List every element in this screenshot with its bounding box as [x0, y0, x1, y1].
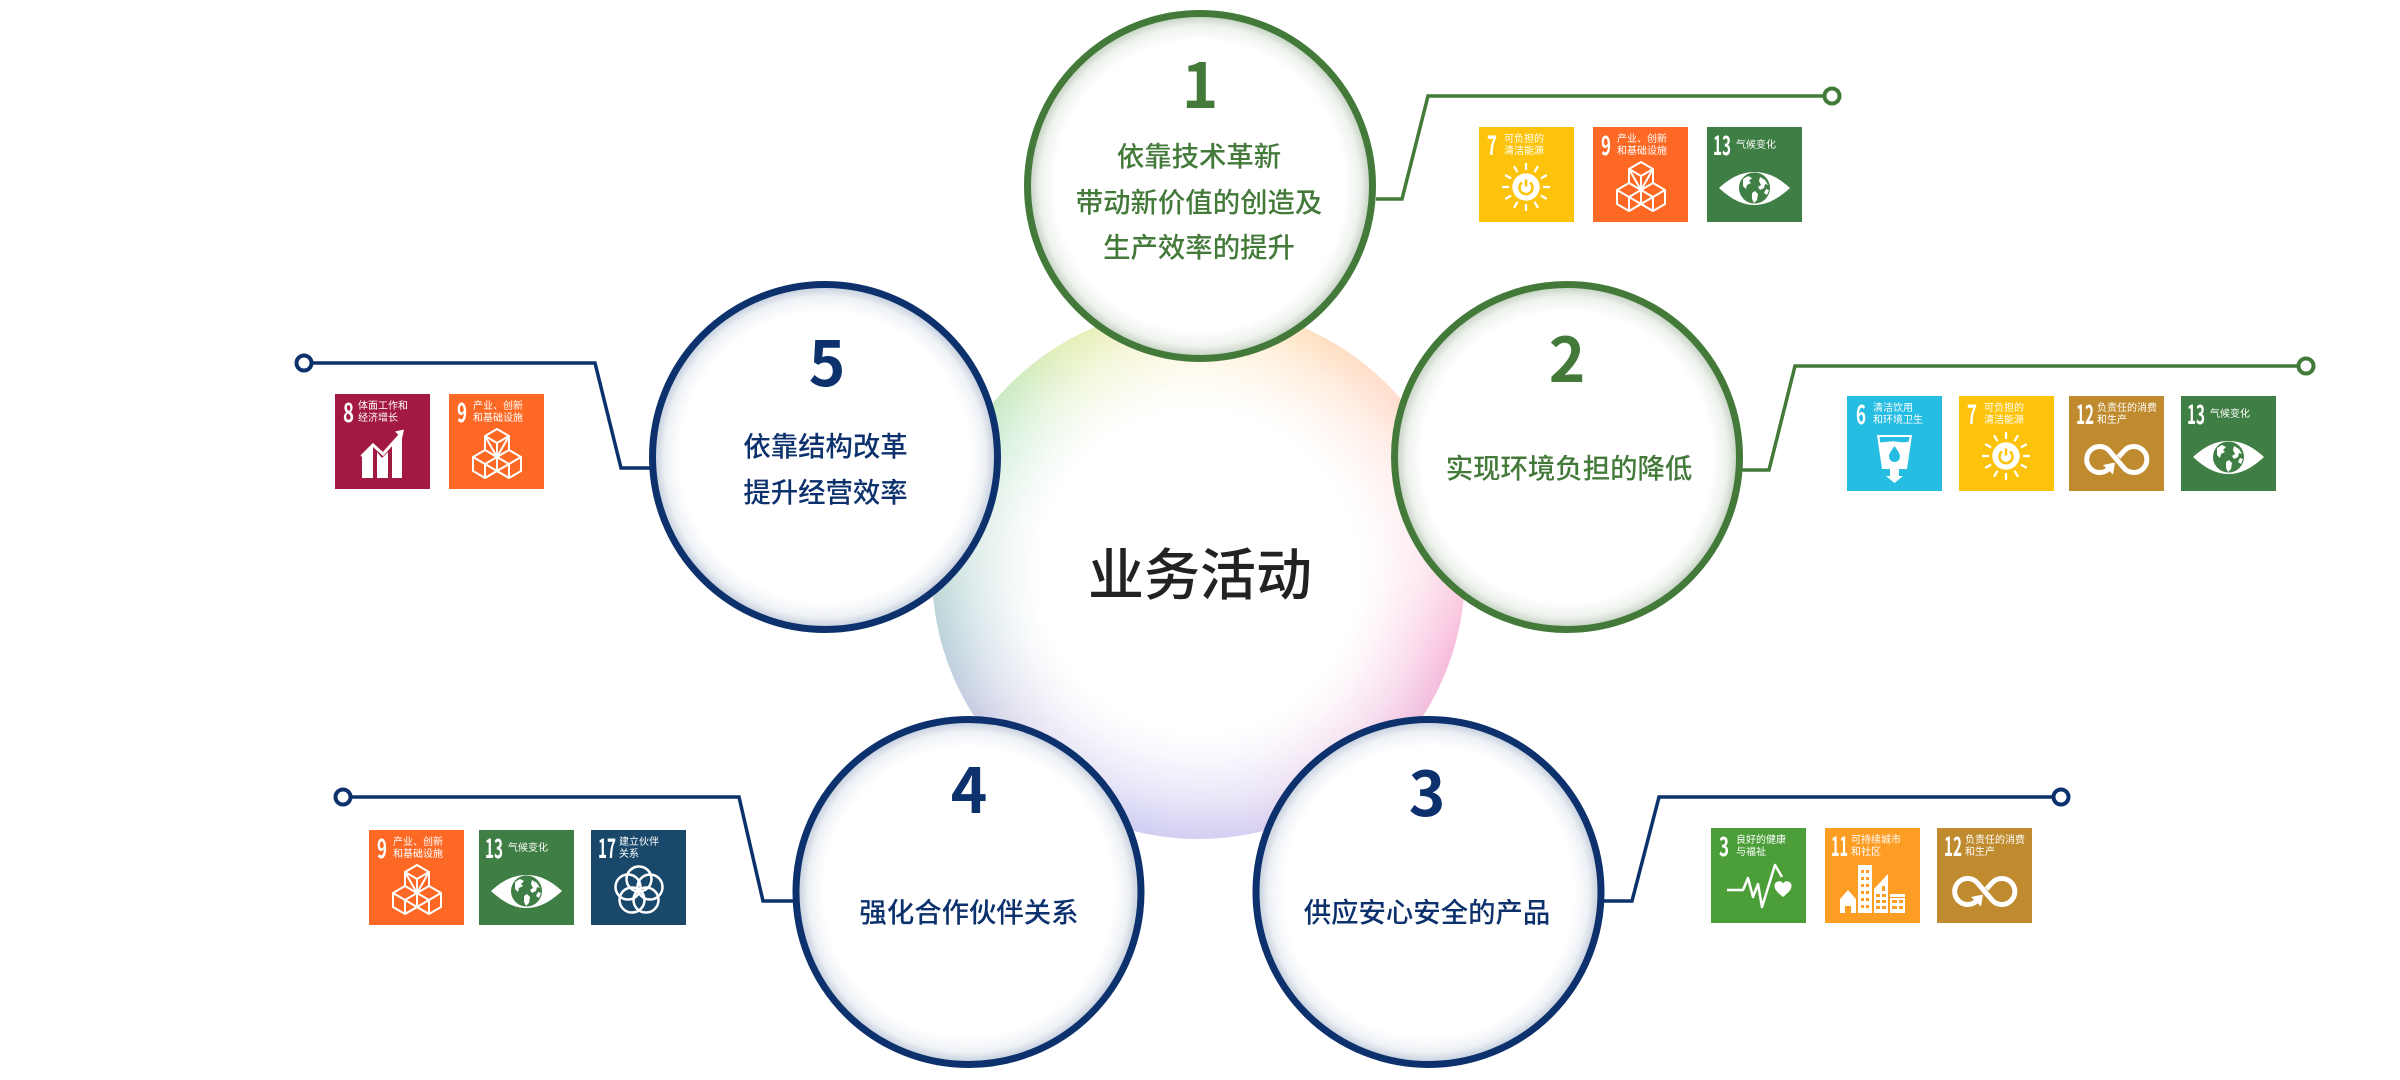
number 5: 5	[809, 314, 845, 404]
panel: circle 3	[1256, 720, 1601, 1064]
number 2: 2	[1549, 310, 1585, 400]
goal badge 13, circle 1: 13	[1713, 126, 1731, 163]
goal badge 8, circle 5: 体面工作和	[358, 400, 408, 412]
goal badge 9, circle 5: 和基础设施	[473, 411, 523, 424]
goal badge 13, circle 1: 气候变化	[1736, 138, 1776, 151]
text: circle 5: 依靠结构改革	[743, 431, 908, 462]
goal badge 17, circle 4: 关系	[619, 847, 639, 860]
goal badge 9, circle 1	[1593, 126, 1688, 222]
goal badge 9, circle 1: 9	[1601, 126, 1611, 163]
goal badge 9, circle 4: 产业、创新	[393, 835, 443, 848]
goal badge 12, circle 3	[1937, 827, 2032, 923]
text: circle 5: 提升经营效率	[743, 477, 908, 508]
goal badge 6, circle 2: 6	[1856, 395, 1866, 432]
goal badge 8, circle 5: 8	[343, 393, 354, 430]
goal badge 12, circle 2: 12	[2076, 395, 2094, 432]
goal badge 12, circle 3: 12	[1944, 827, 1962, 864]
text: circle 3: 供应安心安全的产品	[1304, 897, 1550, 928]
goal badge 7, circle 2: 可负担的	[1984, 401, 2024, 414]
central circle background	[932, 306, 1465, 839]
goal badge 7, circle 2	[1959, 395, 2054, 491]
goal badge 17, circle 4	[591, 829, 686, 925]
text: circle 2: 实现环境负担的降低	[1446, 453, 1692, 484]
goal badge 6, circle 2: 清洁饮用	[1873, 401, 1913, 414]
goal badge 11, circle 3: 11	[1831, 827, 1848, 864]
goal badge 11, circle 3: 可持续城市	[1851, 833, 1901, 846]
goal badge 9, circle 1: 和基础设施	[1617, 144, 1667, 157]
connector: circle 1 to goals	[1376, 88, 1840, 199]
goal badge 9, circle 4	[369, 829, 464, 925]
goal badge 13, circle 2: 气候变化	[2210, 407, 2250, 420]
goal badge 7, circle 2: 清洁能源	[1984, 413, 2024, 426]
goal badge 3, circle 3: 3	[1719, 827, 1729, 864]
panel: circle 4	[796, 720, 1141, 1064]
goal badge 3, circle 3: 良好的健康	[1736, 833, 1786, 846]
number 4: 4	[951, 741, 987, 831]
goal badge 13, circle 4: 气候变化	[508, 841, 548, 854]
connector: circle 5 to goals	[296, 356, 650, 468]
text: circle 1: 依靠技术革新	[1117, 141, 1281, 172]
goal badge 9, circle 4: 9	[377, 829, 387, 866]
goal badge 13, circle 2: 13	[2187, 395, 2205, 432]
goal badge 13, circle 2	[2181, 395, 2276, 491]
goal badge 9, circle 1: 产业、创新	[1617, 132, 1667, 145]
goal badge 7, circle 1	[1479, 126, 1574, 222]
connector: circle 4 to goals	[336, 790, 793, 901]
goal badge 12, circle 2: 和生产	[2097, 413, 2127, 426]
connector: circle 2 to goals	[1741, 358, 2314, 470]
panel: circle 1	[1028, 14, 1372, 358]
goal badge 3, circle 3: 与福祉	[1736, 845, 1766, 858]
goal badge 3, circle 3	[1711, 827, 1806, 923]
goal badge 17, circle 4: 建立伙伴	[619, 835, 659, 848]
number 1: 1	[1182, 36, 1218, 126]
goal badge 6, circle 2	[1847, 395, 1942, 491]
panel: circle 2	[1394, 284, 1740, 630]
connector: circle 3 to goals	[1602, 790, 2068, 901]
text: circle 1: 生产效率的提升	[1103, 232, 1295, 263]
goal badge 7, circle 2: 7	[1967, 395, 1977, 432]
goal badge 9, circle 5	[449, 393, 544, 489]
goal badge 9, circle 4: 和基础设施	[393, 847, 443, 860]
text: circle 4: 强化合作伙伴关系	[859, 897, 1079, 928]
goal badge 11, circle 3	[1825, 827, 1920, 923]
panel: circle 5	[652, 284, 998, 630]
goal badge 7, circle 1: 可负担的	[1504, 132, 1544, 145]
goal badge 13, circle 4: 13	[485, 829, 503, 866]
goal badge 7, circle 1: 清洁能源	[1504, 144, 1544, 157]
goal badge 12, circle 3: 负责任的消费	[1965, 833, 2025, 846]
goal badge 11, circle 3: 和社区	[1851, 845, 1881, 858]
goal badge 9, circle 5: 9	[457, 393, 467, 430]
goal badge 6, circle 2: 和环境卫生	[1873, 413, 1923, 426]
central title: 业务活动	[1088, 544, 1312, 607]
goal badge 17, circle 4: 17	[598, 829, 616, 866]
goal badge 8, circle 5: 经济增长	[358, 411, 398, 424]
goal badge 12, circle 2	[2069, 395, 2164, 491]
goal badge 12, circle 3: 和生产	[1965, 845, 1995, 858]
goal badge 8, circle 5	[335, 393, 430, 489]
goal badge 7, circle 1: 7	[1487, 126, 1497, 163]
text: circle 1: 带动新价值的创造及	[1076, 187, 1322, 218]
number 3: 3	[1409, 744, 1445, 834]
goal badge 12, circle 2: 负责任的消费	[2097, 401, 2157, 414]
goal badge 13, circle 1	[1707, 126, 1802, 222]
goal badge 13, circle 4	[479, 829, 574, 925]
goal badge 9, circle 5: 产业、创新	[473, 399, 523, 412]
